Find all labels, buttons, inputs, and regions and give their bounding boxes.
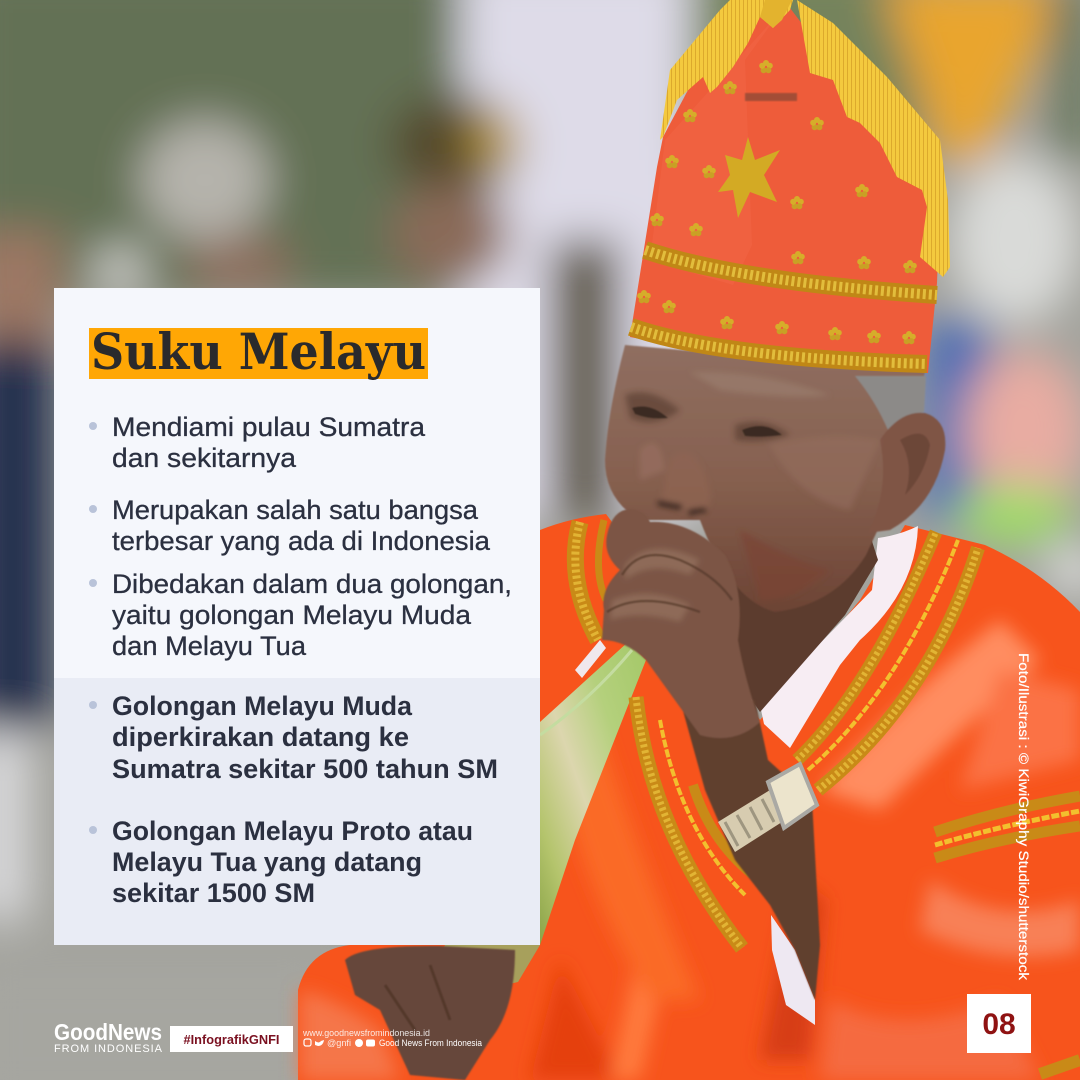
bullet: Golongan Melayu Proto: Melayu Tua yang datang <box>112 847 422 877</box>
bullet: Golongan Melayu Muda: diperkirakan datang ke <box>112 722 409 752</box>
bullet: Golongan Melayu Muda <box>89 691 498 784</box>
panel: text card upper <box>54 288 540 678</box>
icon: twitter <box>315 1040 324 1046</box>
social links: www.goodnewsfromindonesia.id <box>302 1028 430 1038</box>
person: neck <box>725 535 878 712</box>
person: gold embroidery on robe <box>575 520 1080 1074</box>
hat large star <box>718 137 780 218</box>
bullet: Merupakan salah satu bangsa: terbesar yang ada di Indonesia <box>112 526 491 556</box>
bullet: Dibedakan dalam dua golongan: Dibedakan dalam dua golongan, <box>112 569 512 599</box>
logo: GoodNews From Indonesia: FROM INDONESIA <box>54 1043 163 1055</box>
bullet: Mendiami pulau Sumatra: Mendiami pulau Sumatra <box>112 412 426 442</box>
bullet: Dibedakan dalam dua golongan <box>89 569 512 661</box>
person: green horn <box>430 642 646 985</box>
social links: @gnfi <box>327 1038 351 1048</box>
hat right fringe <box>797 0 950 277</box>
bullet: Merupakan salah satu bangsa <box>89 495 491 556</box>
bullet: Golongan Melayu Proto <box>89 816 473 908</box>
person: wristwatch <box>718 764 817 852</box>
bullet: Dibedakan dalam dua golongan: dan Melayu Tua <box>112 631 307 661</box>
bullet: Golongan Melayu Muda: Sumatra sekitar 500 tahun SM <box>112 754 498 784</box>
bullet: Golongan Melayu Muda: Golongan Melayu Muda <box>112 691 413 721</box>
bullet: Golongan Melayu Proto: Golongan Melayu Proto atau <box>112 816 473 846</box>
page number box: 08 <box>982 1008 1016 1041</box>
person: robe <box>298 514 1080 1080</box>
hat left fringe <box>660 0 793 140</box>
photo credit: Foto/Ilustrasi : © KiwiGraphy Studio/shutterstock <box>1016 653 1031 980</box>
heading: Suku Melayu: Suku Melayu <box>91 322 426 381</box>
logo: GoodNews From Indonesia <box>54 1019 163 1055</box>
bullet: Mendiami pulau Sumatra <box>89 412 426 473</box>
bullet: Golongan Melayu Proto: sekitar 1500 SM <box>112 878 315 908</box>
hat gold bands <box>631 250 937 364</box>
hat small flowers <box>637 60 917 344</box>
person: red traditional hat with gold ornaments <box>630 0 950 373</box>
social links: Good News From Indonesia <box>379 1038 482 1048</box>
hat top ornament <box>760 0 792 28</box>
logo: GoodNews From Indonesia: GoodNews <box>54 1019 162 1045</box>
social links <box>302 1028 482 1048</box>
person: face and head <box>605 345 945 612</box>
icon: facebook <box>355 1039 363 1047</box>
page number box <box>967 994 1031 1053</box>
panel: text card lower <box>54 678 540 945</box>
bullet: Mendiami pulau Sumatra: dan sekitarnya <box>112 443 297 473</box>
bullet: Merupakan salah satu bangsa: Merupakan salah satu bangsa <box>112 495 479 525</box>
icon: instagram <box>304 1039 311 1046</box>
hashtag label <box>170 1026 293 1052</box>
person: hand and forearm holding horn <box>345 509 820 1080</box>
icon: youtube <box>366 1040 375 1046</box>
hashtag label: #InfografikGNFI <box>184 1032 280 1047</box>
bullet: Dibedakan dalam dua golongan: yaitu golongan Melayu Muda <box>112 600 472 630</box>
person: white shirt collar <box>575 526 918 1025</box>
